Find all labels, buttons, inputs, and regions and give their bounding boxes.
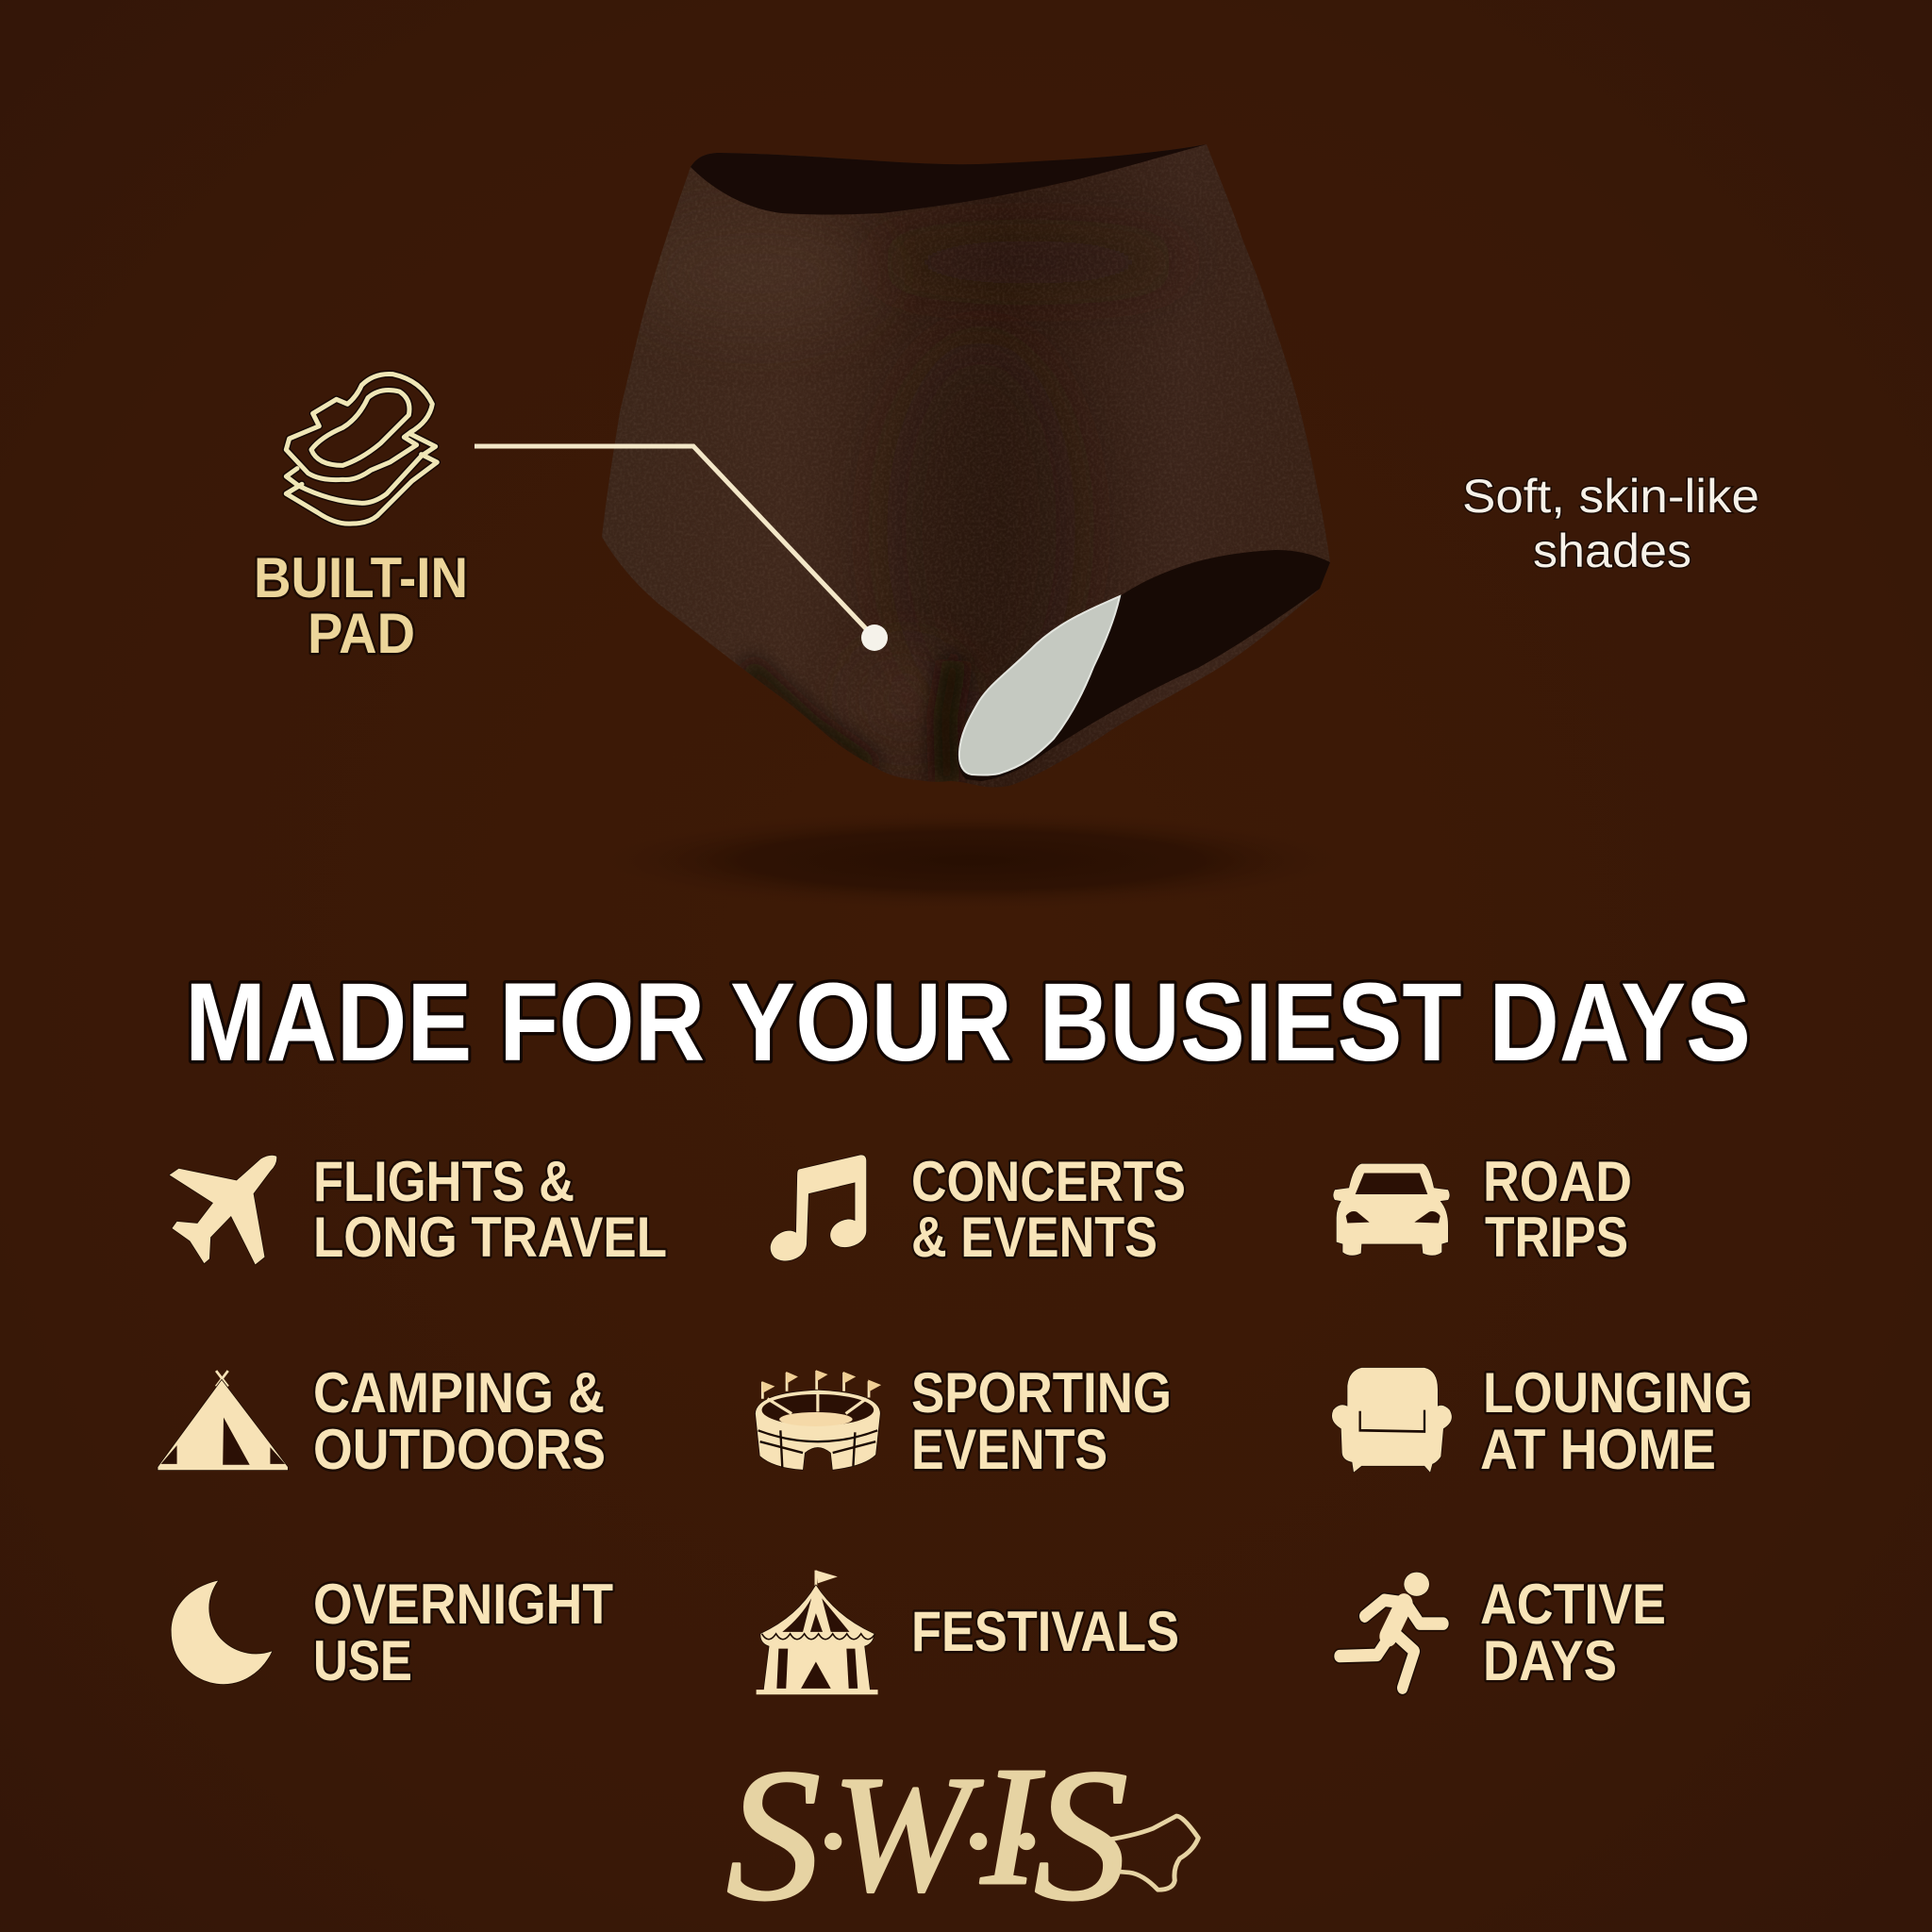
label: OUTDOORS [313,1418,606,1481]
label: soft, skin-like shades [1462,470,1759,577]
item: camping and outdoors [158,1361,606,1481]
floor shadow [585,811,1358,909]
logo: S.W.I.S wordmark: W [832,1742,983,1926]
icon: running figure [1340,1573,1443,1688]
icon: crescent moon [172,1581,272,1684]
item: active days [1340,1573,1666,1692]
label [1483,1150,1632,1269]
icon: airplane [170,1156,276,1264]
logo: S.W.I.S wordmark: · [961,1774,992,1909]
item: concerts and events [771,1150,1186,1269]
label [313,1361,606,1481]
label: ROAD [1483,1150,1632,1213]
item: sporting events [756,1361,1172,1481]
label: soft, skin-like shades: Soft, skin-like [1462,470,1759,523]
logo garment icon [1099,1816,1198,1890]
leg opening [958,550,1330,781]
waistband opening [691,144,1207,215]
label [1480,1573,1666,1692]
title: MADE FOR YOUR BUSIEST DAYS [185,960,1751,1085]
icon: stadium [756,1370,881,1470]
item: flights and long travel [170,1150,667,1269]
label [313,1150,667,1269]
icon: stacked sanitary pads [286,374,437,524]
icon: car [1333,1164,1450,1256]
icon: tent [158,1371,288,1470]
logo: S.W.I.S wordmark: · [1009,1774,1040,1909]
icon: armchair [1332,1368,1452,1473]
label: soft, skin-like shades: shades [1533,525,1691,577]
label [1480,1361,1753,1481]
label: EVENTS [911,1418,1108,1481]
item: lounging at home [1332,1361,1753,1481]
label: DAYS [1483,1629,1617,1692]
white pad [959,596,1120,775]
label [911,1150,1186,1269]
label: AT HOME [1480,1418,1716,1481]
item: festivals [757,1571,1179,1694]
label: LOUNGING [1483,1361,1753,1424]
label [313,1573,613,1692]
label: FLIGHTS & [313,1150,575,1213]
label: built-in pad: BUILT-IN [254,546,468,609]
label: CAMPING & [313,1361,605,1424]
icon: circus tent [757,1571,878,1694]
label: OVERNIGHT [313,1573,613,1636]
garment: brown high-waist underwear with built-in pad [594,142,1340,792]
label: TRIPS [1485,1206,1628,1269]
item: overnight use [172,1573,613,1692]
garment body [602,144,1330,787]
callout line to pad [475,446,888,651]
label: CONCERTS [911,1150,1186,1213]
item: road trips [1333,1150,1632,1269]
logo: S.W.I.S wordmark: I [980,1732,1044,1920]
label: USE [313,1629,412,1692]
label [911,1361,1172,1481]
label: built-in pad [254,546,468,665]
label: FESTIVALS [911,1600,1179,1663]
logo: S.W.I.S wordmark: · [816,1774,847,1909]
label: SPORTING [911,1361,1172,1424]
label: built-in pad: PAD [308,602,415,665]
label: & EVENTS [911,1206,1158,1269]
label: LONG TRAVEL [313,1206,667,1269]
icon: music note [771,1155,866,1260]
callout dot [861,625,888,651]
label: ACTIVE [1480,1573,1666,1636]
logo: S.W.I.S wordmark [726,1731,1198,1932]
